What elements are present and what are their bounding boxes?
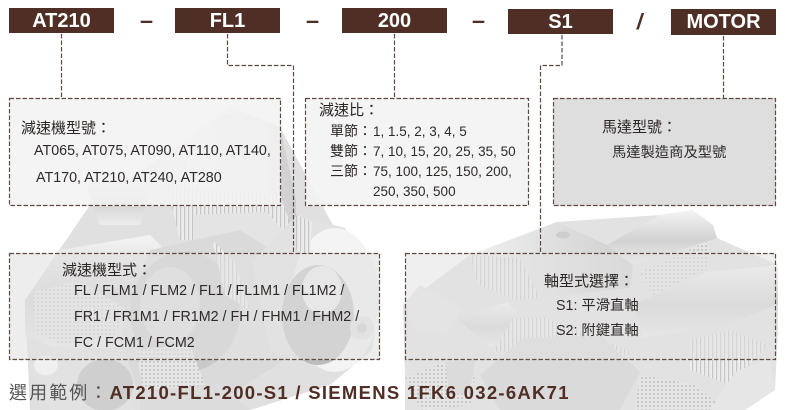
right gearbox [403, 210, 778, 410]
panel: motor model [553, 98, 776, 206]
code box: AT210 [9, 8, 114, 33]
ratio list [330, 123, 516, 199]
heading: motor model: 馬達型號： [602, 119, 677, 136]
code box: S1: S1 [548, 11, 573, 33]
heading: shaft type: 軸型式選擇： [544, 273, 634, 290]
code box: 200 [342, 8, 447, 33]
type list: FC / FCM1 / FCM2 [74, 335, 195, 351]
model list [34, 143, 271, 186]
motor description: 馬達製造商及型號 [612, 145, 726, 161]
code box: FL1: FL1 [210, 10, 245, 32]
left gearbox [25, 107, 380, 410]
model list: AT170, AT210, AT240, AT280 [36, 170, 222, 186]
code box: AT210: AT210 [32, 10, 91, 32]
panel: reduction ratio [305, 98, 529, 206]
code box: S1 [508, 9, 613, 34]
shaft list: S2: 附鍵直軸 [556, 323, 639, 339]
panel: shaft type [405, 253, 776, 360]
heading: gearbox model: 減速機型號： [21, 120, 111, 137]
shaft list: S1: 平滑直軸 [556, 298, 639, 314]
ratio list: 雙節：7, 10, 15, 20, 25, 35, 50 [330, 143, 516, 159]
heading: reduction ratio: 減速比： [319, 102, 379, 119]
type list: FR1 / FR1M1 / FR1M2 / FH / FHM1 / FHM2 / [74, 309, 359, 325]
code box: 200: 200 [378, 10, 411, 32]
selection example: 選用範例：AT210-FL1-200-S1 / SIEMENS 1FK6 032-6AK71 [9, 382, 570, 403]
panel: gearbox model [9, 98, 281, 206]
type list [74, 283, 360, 351]
heading: gearbox type: 減速機型式： [62, 262, 152, 279]
code box: MOTOR [671, 9, 776, 35]
separator slash: / [635, 9, 645, 34]
code box: FL1 [175, 8, 280, 33]
ratio list: 三節：75, 100, 125, 150, 200, [330, 163, 512, 179]
code box: MOTOR: MOTOR [686, 11, 761, 33]
panel: gearbox type [9, 253, 380, 360]
type list: FL / FLM1 / FLM2 / FL1 / FL1M1 / FL1M2 / [74, 283, 344, 299]
separator dash 1: – [140, 7, 153, 33]
separator dash 3: – [472, 7, 485, 33]
model list: AT065, AT075, AT090, AT110, AT140, [34, 143, 271, 159]
separator dash 2: – [306, 7, 319, 33]
shaft list [556, 298, 639, 339]
ratio list: 單節：1, 1.5, 2, 3, 4, 5 [330, 123, 467, 139]
ratio list: 250, 350, 500 [373, 184, 456, 199]
